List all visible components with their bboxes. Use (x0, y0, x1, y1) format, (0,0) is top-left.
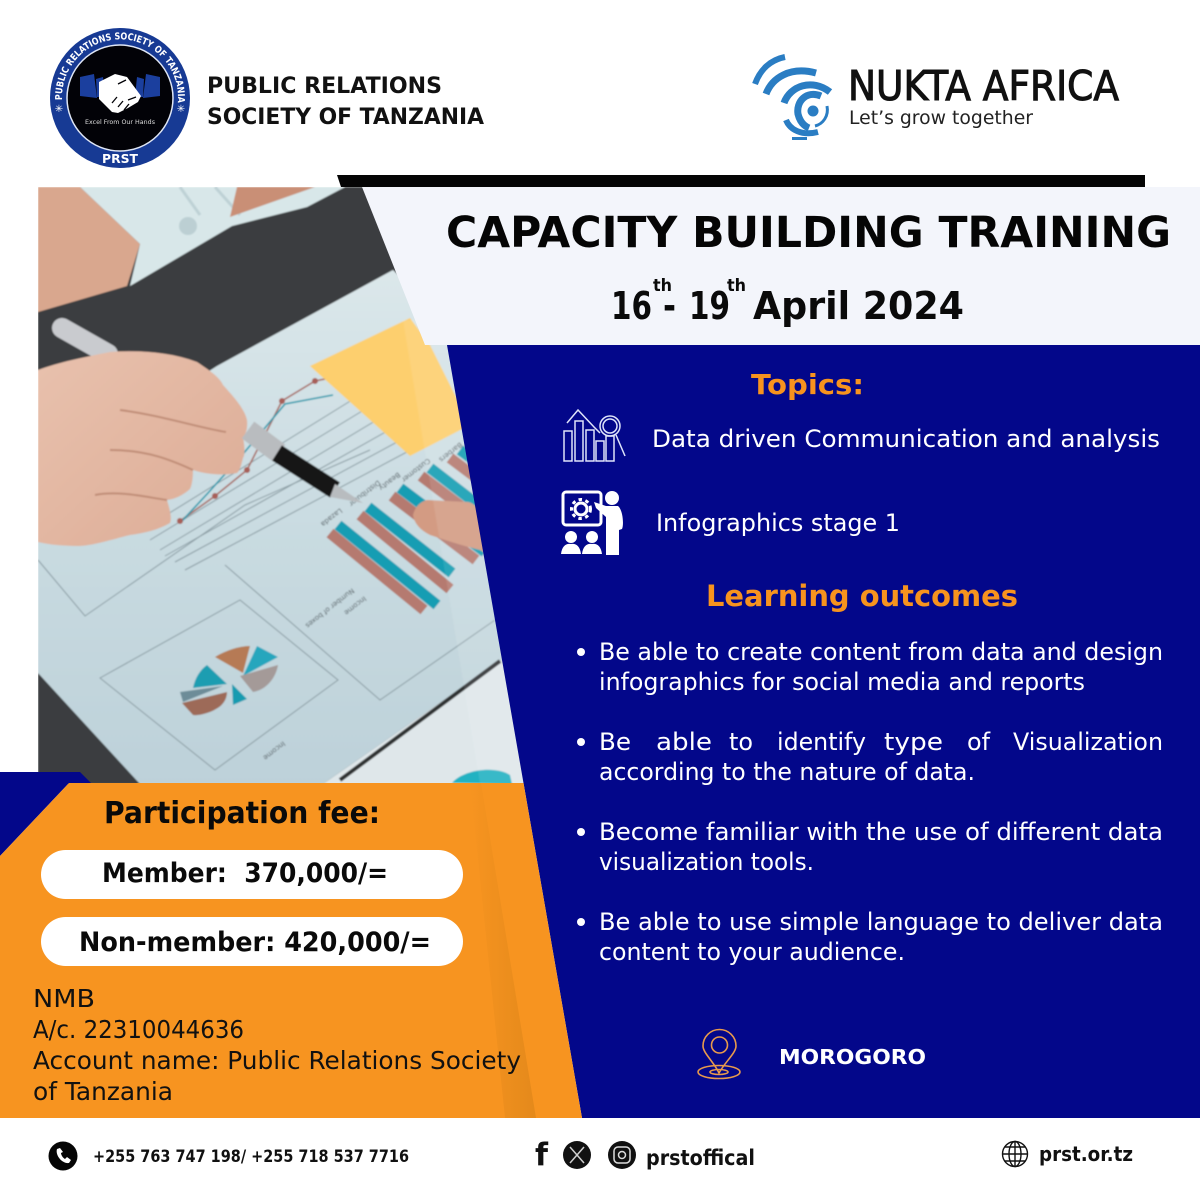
icon: Africa signal arcs (755, 57, 830, 138)
pill: member: Member: 370,000/= (102, 858, 388, 889)
icon: bar chart with magnifier (564, 410, 625, 461)
outcome two: able (656, 728, 712, 756)
pie chart (180, 646, 278, 715)
bar chart (330, 450, 495, 610)
outcome two: to (729, 728, 753, 756)
outcome three (577, 818, 1163, 876)
icon: X (563, 1141, 591, 1169)
shirt sleeve (80, 187, 345, 286)
printed chart labels: Lazada (319, 506, 344, 528)
bank details: of Tanzania (33, 1077, 173, 1106)
printed chart labels: Barbers (437, 440, 464, 464)
fold shadow (470, 783, 536, 1118)
logo: Nukta Africa: NUKTA AFRICA (848, 62, 1119, 110)
logo: Nukta Africa (755, 57, 1119, 138)
bank details: A/c. 22310044636 (33, 1015, 244, 1044)
pen tip (248, 430, 279, 453)
dates: th (727, 276, 746, 296)
outcome three: Become familiar with the use of different data (599, 818, 1163, 846)
text: topic one: Data driven Communication and analysis (652, 425, 1160, 453)
outcome three: visualization tools. (599, 848, 814, 876)
bank details: NMB (33, 984, 95, 1013)
logo: Public Relations Society of Tanzania: ✳ (177, 104, 185, 115)
photo: hands analysing printed charts (38, 187, 540, 784)
organisation name (207, 74, 484, 130)
dates: th (653, 276, 672, 296)
printed chart labels: Number of boxes (303, 586, 356, 630)
navy corner accent (0, 772, 91, 856)
printed chart labels: Income (342, 594, 368, 617)
heading: learning outcomes: Learning outcomes (706, 579, 1018, 613)
top black bar (337, 175, 1145, 187)
line chart (182, 378, 326, 520)
outcome two: of (967, 728, 991, 756)
paper fold highlight (404, 320, 511, 783)
outcome one: infographics for social media and reports (599, 668, 1085, 696)
outcome two: type (884, 728, 943, 756)
social handle: prstoffical (646, 1146, 755, 1170)
outcome two: according to the nature of data. (599, 758, 975, 786)
footer: contacts (48, 1137, 1133, 1173)
outcome four: Be able to use simple language to deliver data (599, 908, 1163, 936)
dates: - (663, 284, 676, 328)
heading: topics: Topics: (751, 368, 864, 401)
organisation name: PUBLIC RELATIONS (207, 74, 442, 99)
outcome two (577, 728, 1163, 786)
outcome one (577, 638, 1163, 696)
icon: phone (48, 1142, 78, 1170)
logo: Nukta Africa: Let’s grow together (849, 107, 1033, 129)
logo: Public Relations Society of Tanzania: Excel From Our Hands (85, 119, 155, 126)
printed chart labels (261, 440, 464, 762)
logo: Public Relations Society of Tanzania: PRST (102, 152, 139, 166)
bank details: Account name: Public Relations Society (33, 1046, 521, 1075)
panel: participation fee (0, 783, 582, 1118)
heading: Participation fee: (104, 796, 380, 831)
bank details (33, 984, 521, 1106)
printed chart labels: Income (261, 739, 287, 762)
forearm (38, 187, 140, 312)
logo: Public Relations Society of Tanzania: ✳ (55, 104, 63, 115)
heading: CAPACITY BUILDING TRAINING (446, 208, 1171, 258)
website: prst.or.tz (1039, 1142, 1133, 1166)
dates: 19 (689, 284, 730, 328)
outcome one: Be able to create content from data and design (599, 638, 1163, 666)
outcome two: identify (777, 728, 866, 756)
phone numbers: +255 763 747 198/ +255 718 537 7716 (93, 1147, 409, 1167)
icon: location pin (698, 1030, 740, 1078)
teal disc (452, 770, 512, 784)
icon: presenter with audience (561, 491, 623, 555)
printed chart labels: Customer (400, 456, 432, 484)
right finger (412, 499, 484, 553)
printed chart labels: Distributor (347, 478, 382, 508)
panel: title (362, 187, 1200, 345)
pen barrel (62, 328, 108, 354)
outcome two: Visualization (1013, 728, 1163, 756)
panel: topics and outcomes (447, 345, 1200, 1118)
yellow wedge (310, 318, 470, 456)
dates (611, 276, 964, 328)
outcome two: Be (599, 728, 631, 756)
outcome four (577, 908, 1163, 966)
location name: MOROGORO (779, 1045, 926, 1069)
dates: April 2024 (753, 284, 964, 328)
pill: non-member: Non-member: 420,000/= (79, 927, 431, 958)
printed chart labels: Beauty (377, 470, 402, 492)
pill: member (41, 850, 463, 899)
icon: globe (1002, 1142, 1028, 1166)
dates: 16 (611, 284, 652, 328)
icon: instagram (608, 1141, 636, 1169)
logo: Public Relations Society of Tanzania: PUBLIC RELATIONS SOCIETY OF TANZANIA (55, 32, 185, 103)
text: topic two: Infographics stage 1 (656, 509, 900, 537)
hand holding pen (38, 351, 247, 546)
grid lines (38, 395, 495, 770)
organisation name: SOCIETY OF TANZANIA (207, 105, 484, 130)
pill: non-member (41, 917, 463, 966)
logo: Public Relations Society of Tanzania (50, 28, 190, 168)
chart paper (38, 270, 540, 784)
icon: facebook: f (535, 1137, 548, 1173)
outcome four: content to your audience. (599, 938, 905, 966)
